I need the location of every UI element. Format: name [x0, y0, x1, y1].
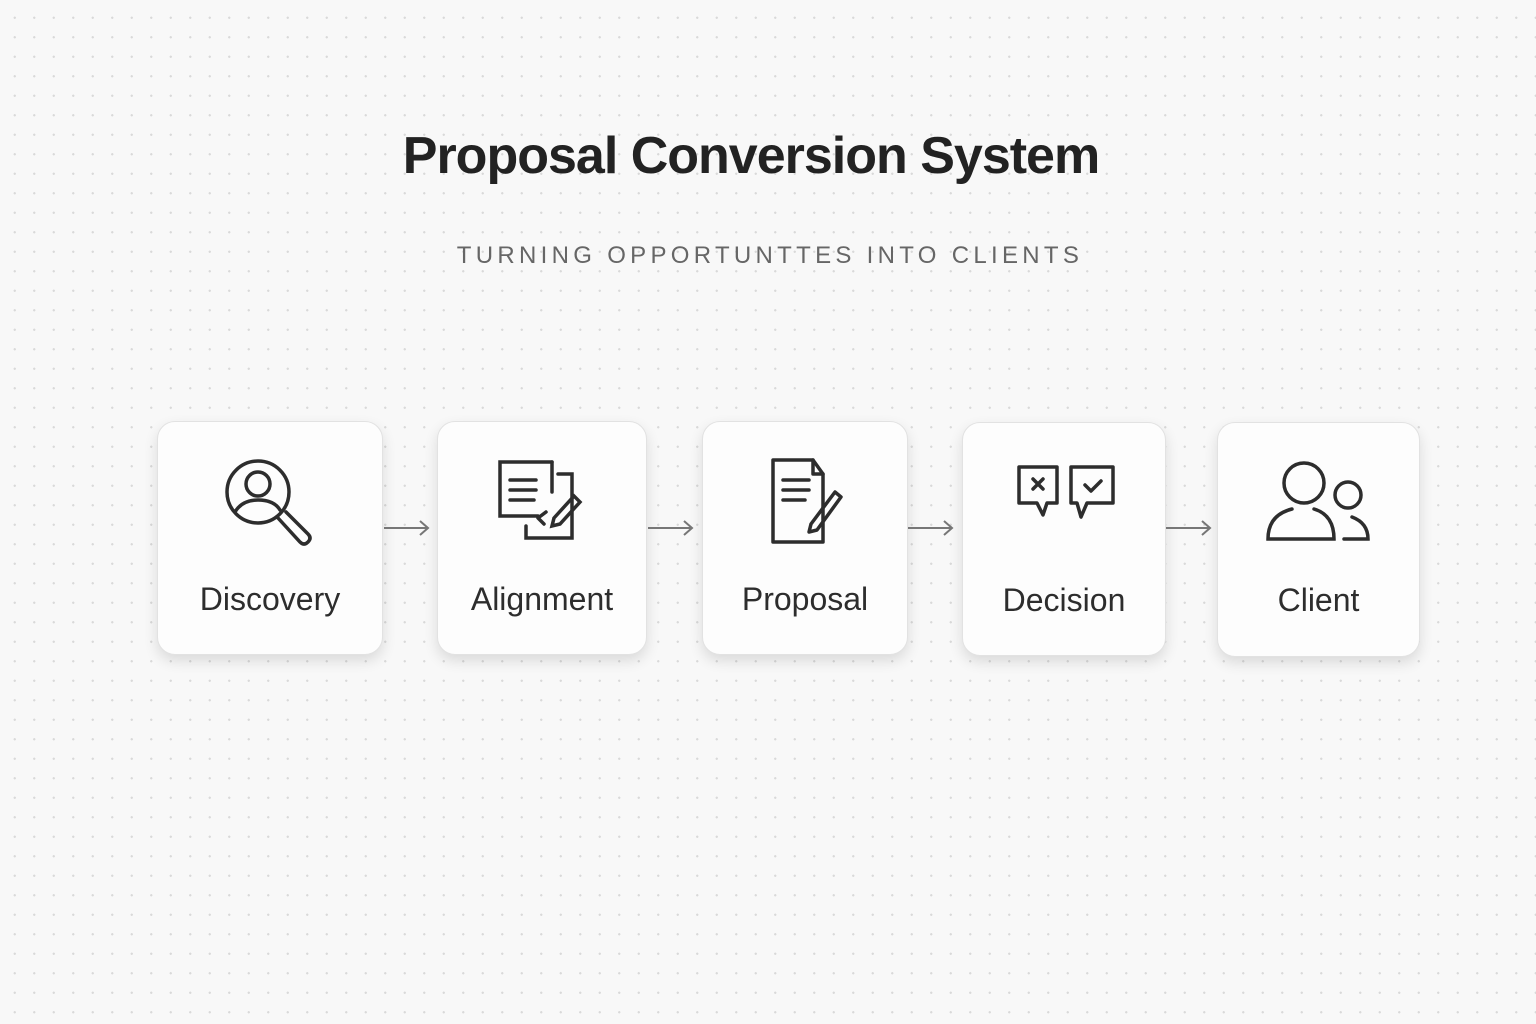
icon: people	[1266, 461, 1370, 541]
subtitle: TURNING OPPORTUNTTES INTO CLIENTS	[457, 242, 1083, 269]
label: Proposal	[742, 581, 868, 617]
title: Proposal Conversion System	[403, 127, 1099, 185]
card: proposal	[702, 421, 908, 655]
label: Alignment	[471, 581, 613, 617]
arrow	[384, 520, 430, 536]
card: alignment	[437, 421, 647, 655]
icon: magnifier person	[225, 459, 312, 546]
icon: document pencil	[771, 458, 843, 544]
arrow	[1166, 520, 1212, 536]
card: decision	[962, 422, 1166, 656]
label: Client	[1278, 582, 1359, 618]
card: discovery	[157, 421, 383, 655]
label: Decision	[1003, 582, 1125, 618]
icon: speech bubbles	[1017, 465, 1115, 519]
arrow	[648, 520, 694, 536]
label: Discovery	[200, 581, 340, 617]
arrow	[908, 520, 954, 536]
icon: documents with pen	[498, 460, 582, 540]
card: client	[1217, 422, 1420, 657]
